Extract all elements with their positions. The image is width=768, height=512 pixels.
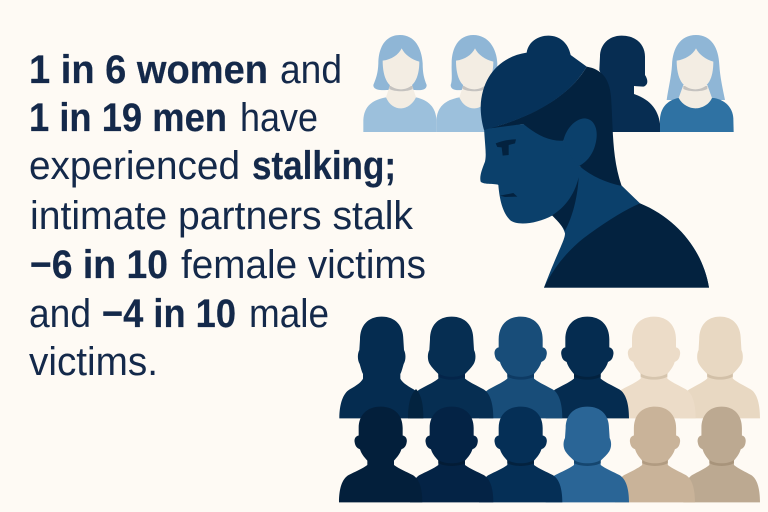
grid of male silhouettes: [339, 317, 760, 502]
statistic text: have: [240, 96, 318, 140]
woman 4: [660, 35, 734, 132]
woman 2: [436, 35, 497, 132]
statistic text: 1 in 19 men: [29, 96, 227, 140]
woman 3 silhouette: [599, 36, 661, 132]
statistic text: [29, 48, 426, 384]
statistic text: male: [249, 292, 329, 336]
statistic text: female victims: [181, 243, 426, 287]
back row of figures: [339, 317, 760, 418]
statistic text: 1 in 6 women: [29, 48, 268, 92]
main profile figure: bowed head: [480, 36, 709, 288]
statistic text: and: [280, 48, 342, 92]
statistic text: victims.: [29, 340, 158, 384]
statistic text: −6 in 10: [30, 243, 168, 287]
statistic text: stalking;: [252, 144, 396, 188]
woman 1: [363, 35, 436, 132]
top row of women and main profile figure: [363, 35, 734, 288]
statistic text: intimate partners stalk: [30, 194, 414, 238]
statistic text: and: [29, 292, 91, 336]
statistic text: −4 in 10: [102, 292, 236, 336]
statistic text: experienced: [29, 144, 240, 188]
front row of figures: [339, 407, 760, 502]
